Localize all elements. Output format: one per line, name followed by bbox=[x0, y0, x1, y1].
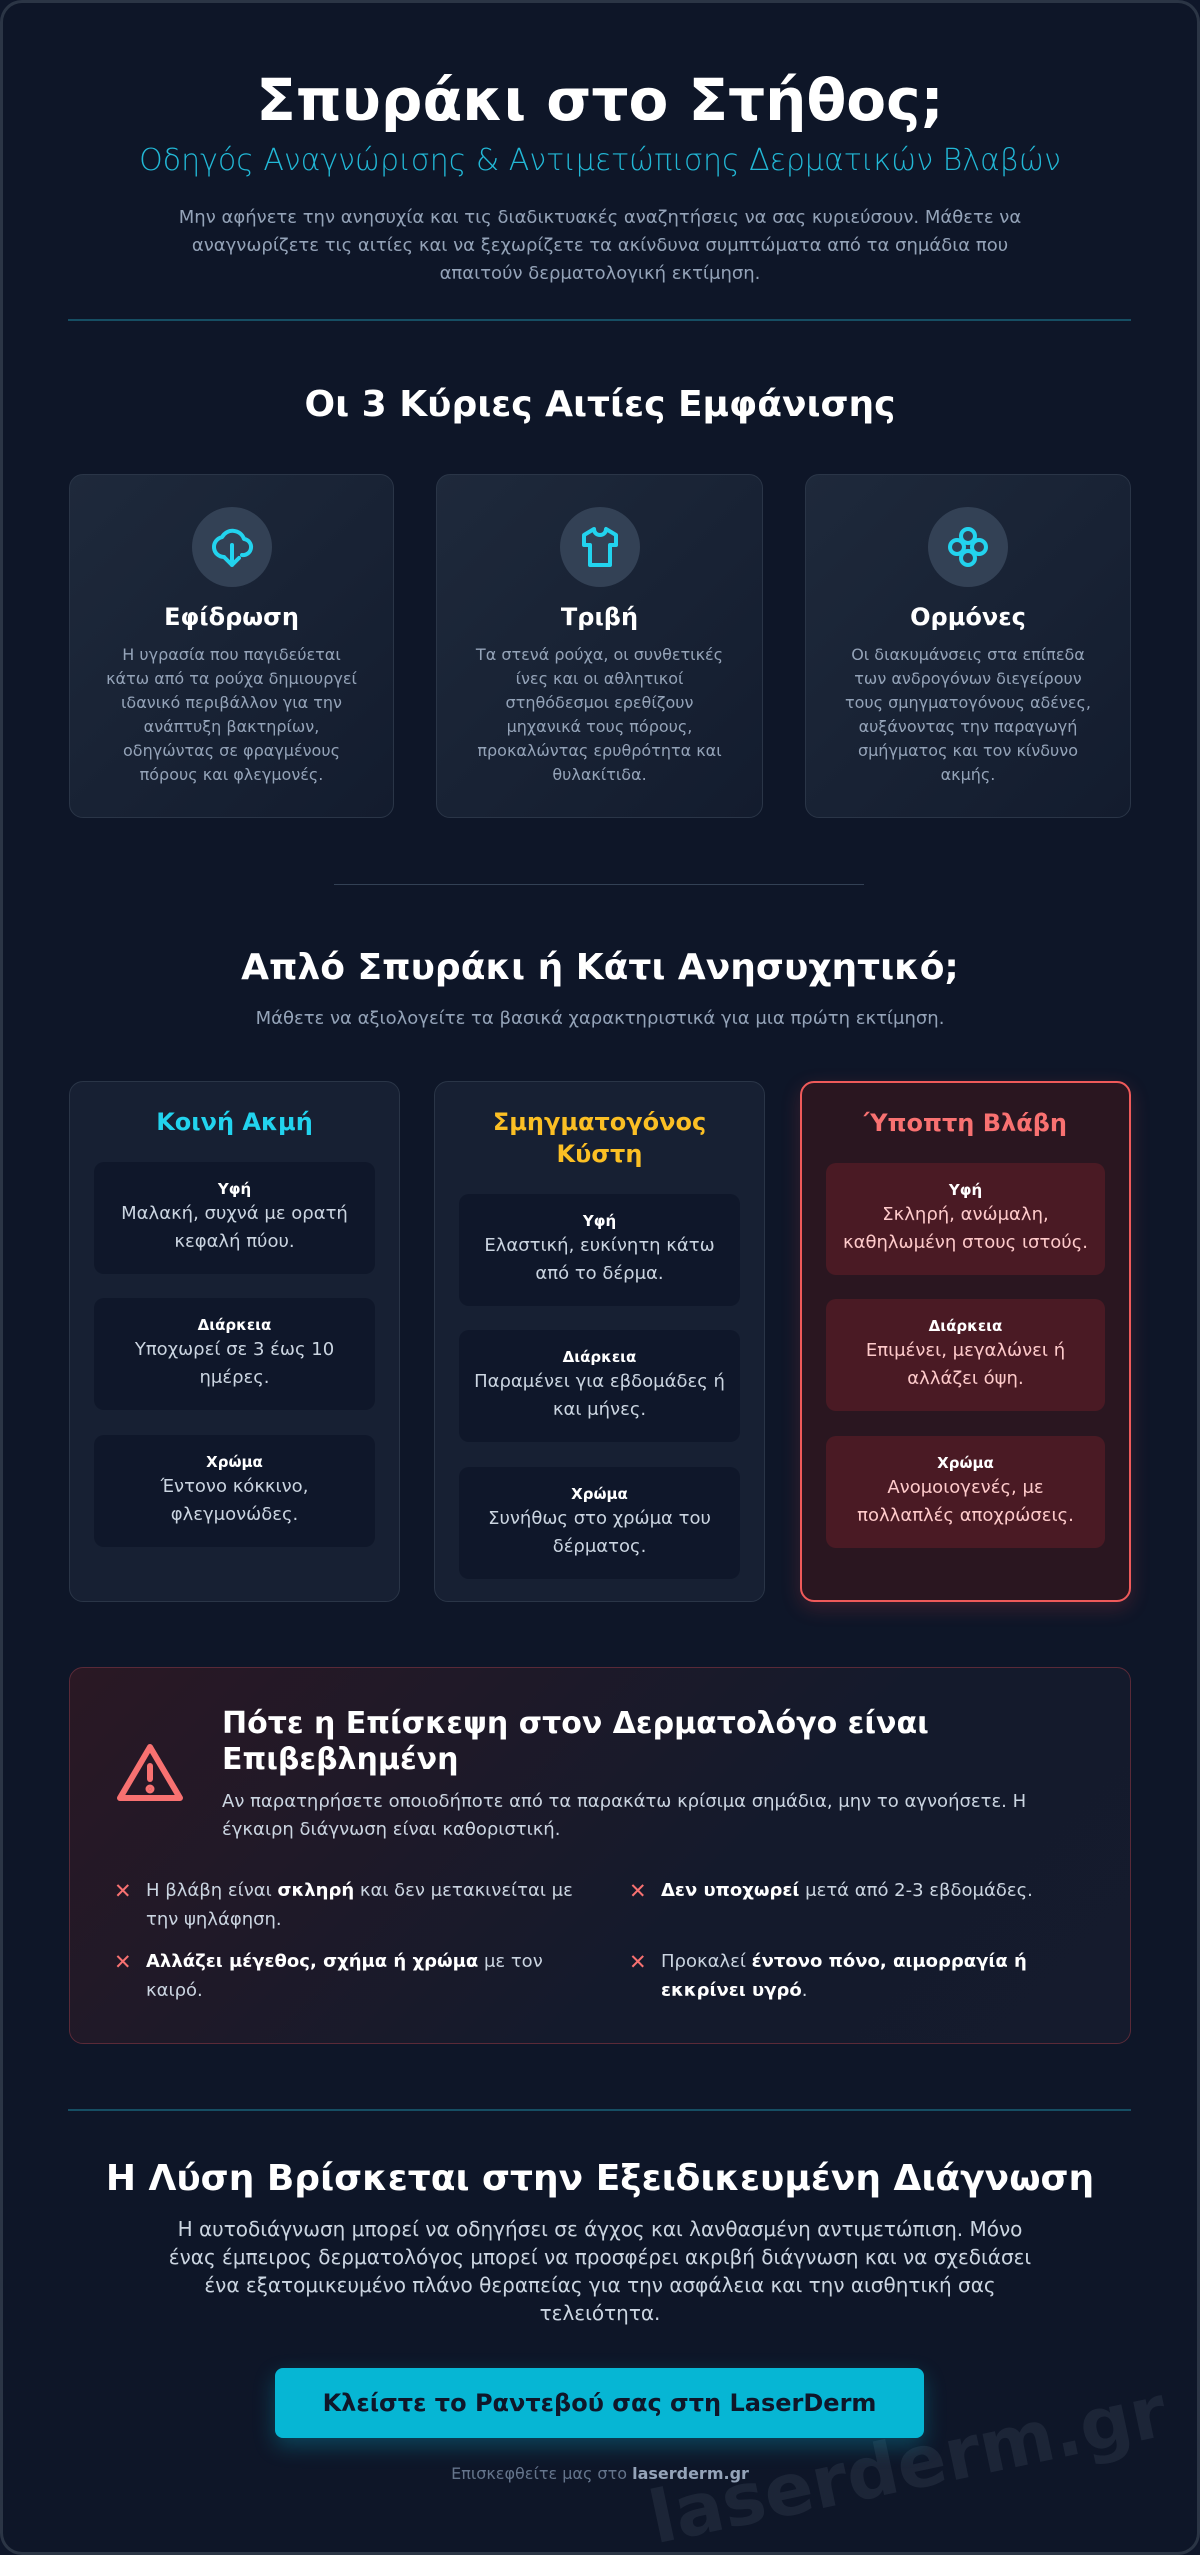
panel: sweating bbox=[69, 474, 394, 818]
box: texture bbox=[459, 1194, 740, 1306]
panel: suspicious lesion bbox=[800, 1081, 1131, 1602]
box: duration: Παραμένει για εβδομάδες ή bbox=[474, 1371, 725, 1392]
icon: shirt bbox=[560, 507, 640, 587]
card text: ακμής. bbox=[941, 765, 995, 784]
icon: flower bbox=[928, 507, 1008, 587]
footer: Επισκεφθείτε μας στο laserderm.gr bbox=[451, 2464, 749, 2483]
card text: Οι διακυμάνσεις στα επίπεδα bbox=[851, 645, 1085, 664]
box: colour: Χρώμα bbox=[937, 1454, 994, 1472]
card text: ανάπτυξη βακτηρίων, bbox=[144, 717, 319, 736]
box: colour: Συνήθως στο χρώμα του bbox=[488, 1508, 711, 1529]
column title: Σμηγματογόνος bbox=[493, 1108, 706, 1136]
icon: cloud drop bbox=[192, 507, 272, 587]
box: colour: Έντονο κόκκινο, bbox=[161, 1476, 308, 1497]
box: colour: φλεγμονώδες. bbox=[171, 1504, 298, 1525]
comparison subtitle: Μάθετε να αξιολογείτε τα βασικά χαρακτηριστικά για μια πρώτη εκτίμηση. bbox=[256, 1008, 944, 1029]
card text: Η υγρασία που παγιδεύεται bbox=[122, 645, 341, 664]
box: colour: πολλαπλές αποχρώσεις. bbox=[857, 1505, 1074, 1526]
card text: ιδανικό περιβάλλον για την bbox=[121, 693, 342, 712]
card text: πόρους και φλεγμονές. bbox=[140, 765, 323, 784]
box: texture: Υφή bbox=[949, 1181, 982, 1199]
panel: warning: ✕ bbox=[114, 1879, 132, 1903]
panel: warning: ✕ bbox=[114, 1950, 132, 1974]
box: texture: Μαλακή, συχνά με ορατή bbox=[121, 1203, 348, 1224]
box: texture: Υφή bbox=[218, 1180, 251, 1198]
bullet 1: Η βλάβη είναι σκληρή και δεν μετακινείται με bbox=[146, 1880, 573, 1901]
box: texture: κεφαλή πύου. bbox=[174, 1231, 295, 1252]
card text: προκαλώντας ερυθρότητα και bbox=[477, 741, 722, 760]
box: colour bbox=[94, 1435, 375, 1547]
title: Σπυράκι στο Στήθος; bbox=[256, 66, 944, 134]
intro paragraph bbox=[179, 207, 1021, 284]
bullet 3 bbox=[114, 1950, 543, 2001]
box: texture: Ελαστική, ευκίνητη κάτω bbox=[484, 1235, 715, 1256]
column title: Κύστη bbox=[557, 1140, 642, 1168]
box: duration: Διάρκεια bbox=[198, 1316, 271, 1334]
bullet 1 bbox=[114, 1879, 573, 1930]
column title: Κοινή Ακμή bbox=[156, 1108, 313, 1136]
solution paragraph: Η αυτοδιάγνωση μπορεί να οδηγήσει σε άγχος και λανθασμένη αντιμετώπιση. Μόνο bbox=[178, 2217, 1022, 2241]
box: duration: ημέρες. bbox=[199, 1367, 270, 1388]
card text: σμήγματος και τον κίνδυνο bbox=[858, 741, 1078, 760]
CTA button bbox=[275, 2368, 924, 2438]
card text: των ανδρογόνων διεγείρουν bbox=[854, 669, 1082, 688]
column title: Ύποπτη Βλάβη bbox=[864, 1109, 1067, 1137]
card text: τους σμηγματογόνους αδένες, bbox=[845, 693, 1091, 712]
bullet 3: Αλλάζει μέγεθος, σχήμα ή χρώμα με τον bbox=[146, 1951, 543, 1972]
bullet 3: καιρό. bbox=[146, 1980, 203, 2001]
box: duration bbox=[826, 1299, 1105, 1411]
panel: warning: ✕ bbox=[629, 1879, 647, 1903]
box: duration bbox=[459, 1330, 740, 1442]
solution paragraph bbox=[169, 2217, 1031, 2325]
panel: common acne bbox=[69, 1081, 400, 1602]
box: duration: Υποχωρεί σε 3 έως 10 bbox=[135, 1339, 334, 1360]
box: texture: καθηλωμένη στους ιστούς. bbox=[843, 1232, 1088, 1253]
bullet 4: Προκαλεί έντονο πόνο, αιμορραγία ή bbox=[661, 1951, 1027, 1972]
box: duration: και μήνες. bbox=[553, 1399, 646, 1420]
box: colour bbox=[826, 1436, 1105, 1548]
box: duration bbox=[94, 1298, 375, 1410]
bullet 2: Δεν υποχωρεί μετά από 2-3 εβδομάδες. bbox=[661, 1880, 1033, 1901]
bullet 1: την ψηλάφηση. bbox=[146, 1909, 282, 1930]
card text: στηθόδεσμοι ερεθίζουν bbox=[506, 693, 693, 712]
card text: ίνες και οι αθλητικοί bbox=[516, 669, 683, 688]
column title bbox=[493, 1108, 706, 1168]
warning heading: Επιβεβλημένη bbox=[222, 1742, 458, 1777]
heading: causes: Οι 3 Κύριες Αιτίες Εμφάνισης bbox=[304, 384, 896, 425]
subtitle: Οδηγός Αναγνώρισης & Αντιμετώπισης Δερματικών Βλαβών bbox=[139, 143, 1061, 178]
card text bbox=[106, 645, 357, 784]
heading: solution: Η Λύση Βρίσκεται στην Εξειδικευμένη Διάγνωση bbox=[106, 2158, 1094, 2199]
panel: warning: ✕ bbox=[629, 1950, 647, 1974]
box: colour: Χρώμα bbox=[206, 1453, 263, 1471]
warning heading bbox=[222, 1706, 929, 1777]
box: texture: Υφή bbox=[583, 1212, 616, 1230]
intro paragraph: απαιτούν δερματολογική εκτίμηση. bbox=[440, 263, 760, 284]
box: duration: Διάρκεια bbox=[563, 1348, 636, 1366]
box: texture bbox=[94, 1162, 375, 1274]
box: colour: δέρματος. bbox=[553, 1536, 646, 1557]
card title: Εφίδρωση bbox=[164, 603, 299, 631]
card text: θυλακίτιδα. bbox=[552, 765, 647, 784]
card text: κάτω από τα ρούχα δημιουργεί bbox=[106, 669, 357, 688]
heading: comparison: Απλό Σπυράκι ή Κάτι Ανησυχητικό; bbox=[241, 947, 959, 988]
card text bbox=[476, 645, 723, 784]
warning text: Αν παρατηρήσετε οποιοδήποτε από τα παρακάτω κρίσιμα σημάδια, μην το αγνοήσετε. Η bbox=[222, 1791, 1026, 1812]
bullet 4: εκκρίνει υγρό. bbox=[661, 1980, 807, 2001]
watermark: laserderm.gr bbox=[642, 2369, 1174, 2555]
card text: μηχανικά τους πόρους, bbox=[507, 717, 692, 736]
solution paragraph: ένας έμπειρος δερματολόγος μπορεί να προσφέρει ακριβή διάγνωση και να σχεδιάσει bbox=[169, 2245, 1031, 2269]
box: texture: από το δέρμα. bbox=[535, 1263, 664, 1284]
CTA button: Κλείστε το Ραντεβού σας στη LaserDerm bbox=[323, 2389, 876, 2417]
box: duration: Επιμένει, μεγαλώνει ή bbox=[866, 1340, 1065, 1361]
card title: Τριβή bbox=[561, 603, 638, 631]
warning text: έγκαιρη διάγνωση είναι καθοριστική. bbox=[222, 1819, 560, 1840]
panel: sebaceous cyst bbox=[434, 1081, 765, 1602]
panel: hormones bbox=[805, 474, 1131, 818]
warning heading: Πότε η Επίσκεψη στον Δερματολόγο είναι bbox=[222, 1706, 929, 1741]
box: colour: Ανομοιογενές, με bbox=[887, 1477, 1044, 1498]
box: texture: Σκληρή, ανώμαλη, bbox=[882, 1204, 1049, 1225]
icon: warning triangle bbox=[117, 1744, 183, 1801]
panel: warning bbox=[69, 1667, 1131, 2044]
intro paragraph: αναγνωρίζετε τις αιτίες και να ξεχωρίζετε τα ακίνδυνα συμπτώματα από τα σημάδια που bbox=[192, 235, 1008, 256]
card text: οδηγώντας σε φραγμένους bbox=[123, 741, 340, 760]
bullet 4 bbox=[629, 1950, 1027, 2001]
box: duration: αλλάζει όψη. bbox=[907, 1368, 1024, 1389]
box: duration: Διάρκεια bbox=[929, 1317, 1002, 1335]
box: colour: Χρώμα bbox=[571, 1485, 628, 1503]
panel: friction bbox=[436, 474, 763, 818]
box: texture bbox=[826, 1163, 1105, 1275]
card text bbox=[845, 645, 1091, 784]
warning text bbox=[222, 1791, 1026, 1840]
solution paragraph: τελειότητα. bbox=[540, 2301, 660, 2325]
intro paragraph: Μην αφήνετε την ανησυχία και τις διαδικτυακές αναζητήσεις να σας κυριεύσουν. Μάθετε να bbox=[179, 207, 1021, 228]
box: colour bbox=[459, 1467, 740, 1579]
card title: Ορμόνες bbox=[910, 603, 1026, 631]
card text: αυξάνοντας την παραγωγή bbox=[859, 717, 1077, 736]
solution paragraph: ένα εξατομικευμένο πλάνο θεραπείας για την ασφάλεια και την αισθητική σας bbox=[204, 2273, 996, 2297]
card text: Τα στενά ρούχα, οι συνθετικές bbox=[476, 645, 723, 664]
